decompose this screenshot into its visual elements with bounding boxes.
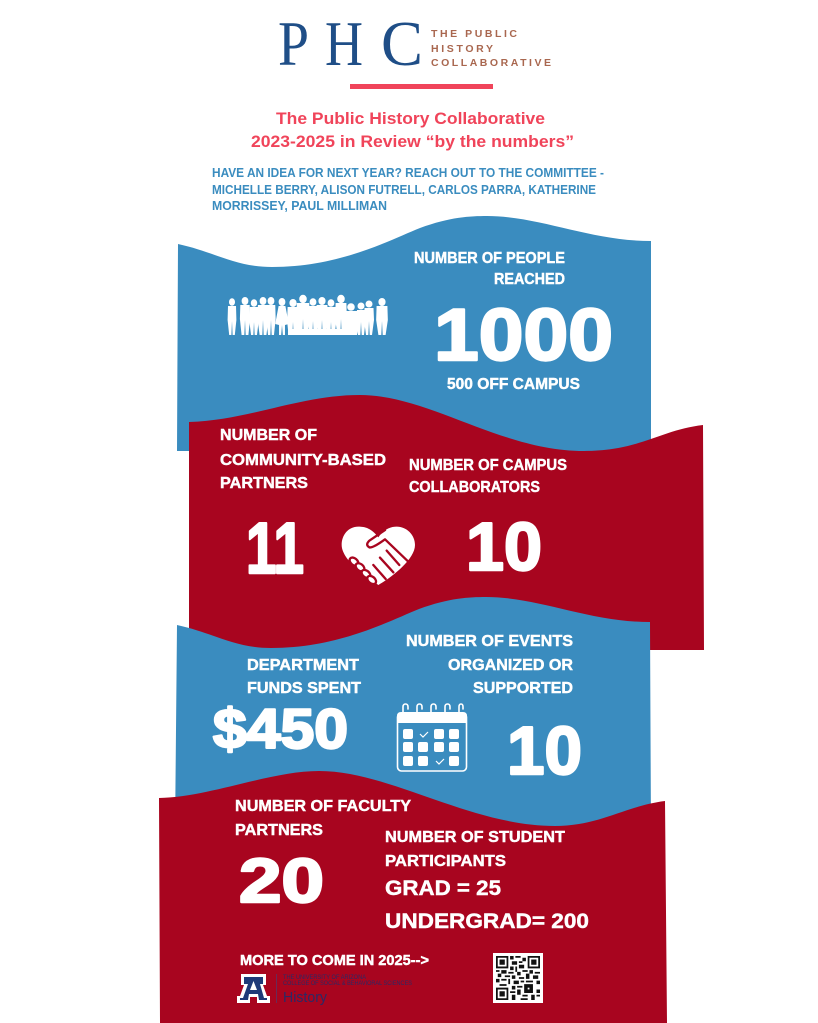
events label: ORGANIZED OR (448, 657, 573, 674)
student participants: UNDERGRAD= 200 (385, 910, 589, 933)
committee note (212, 166, 604, 213)
icon: crowd silhouette (228, 295, 388, 335)
logo: PHC The Public History Collaborative: H (325, 9, 363, 79)
committee note: MORRISSEY, PAUL MILLIMAN (212, 199, 387, 213)
committee note: HAVE AN IDEA FOR NEXT YEAR? REACH OUT TO THE COMMITTEE - (212, 166, 604, 180)
community partners label: NUMBER OF (220, 427, 317, 444)
logo: University of Arizona History: COLLEGE OF SOCIAL & BEHAVIORAL SCIENCES (283, 981, 412, 987)
number: 10 events: 10 (507, 713, 582, 789)
campus collaborators label: COLLABORATORS (409, 479, 540, 496)
panel: funds and events (175, 597, 651, 835)
community partners label: PARTNERS (220, 475, 308, 492)
logo: PHC The Public History Collaborative: P (278, 9, 309, 79)
logo: University of Arizona History (237, 974, 412, 1006)
community partners label: COMMUNITY-BASED (220, 452, 386, 469)
committee note: MICHELLE BERRY, ALISON FUTRELL, CARLOS PARRA, KATHERINE (212, 183, 596, 197)
number: 1000: 1000 (434, 295, 613, 376)
community partners label (220, 427, 386, 492)
panel: partners and collaborators (189, 395, 704, 650)
title (251, 110, 574, 151)
number: 10 collaborators: 10 (466, 509, 542, 585)
number: 11: 11 (246, 509, 304, 589)
funds label (247, 657, 361, 697)
funds label: DEPARTMENT (247, 657, 359, 674)
logo: PHC The Public History Collaborative: C (381, 9, 423, 79)
student participants: PARTICIPANTS (385, 853, 506, 870)
faculty label: NUMBER OF FACULTY (235, 798, 411, 815)
logo: PHC The Public History Collaborative: THE PUBLIC (431, 28, 517, 40)
people reached label: NUMBER OF PEOPLE (414, 250, 565, 267)
funds label: FUNDS SPENT (247, 680, 361, 697)
campus collaborators label: NUMBER OF CAMPUS (409, 457, 567, 474)
logo: University of Arizona History: THE UNIVERSITY OF ARIZONA (283, 975, 366, 981)
logo: University of Arizona History: History (283, 989, 327, 1006)
panel: people reached (177, 216, 651, 451)
title: 2023-2025 in Review “by the numbers” (251, 133, 574, 151)
faculty label (235, 798, 411, 839)
student participants (385, 829, 589, 933)
icon: handshake heart (342, 527, 415, 586)
number: 20: 20 (239, 847, 324, 916)
logo: PHC The Public History Collaborative: COLLABORATIVE (431, 57, 551, 69)
QR code (493, 953, 543, 1003)
student participants: GRAD = 25 (385, 877, 501, 900)
events label: NUMBER OF EVENTS (406, 633, 573, 650)
faculty label: PARTNERS (235, 822, 323, 839)
more to come: MORE TO COME IN 2025--> (240, 953, 429, 969)
student participants: NUMBER OF STUDENT (385, 829, 565, 846)
events label: SUPPORTED (473, 680, 573, 697)
people reached label: REACHED (494, 271, 565, 288)
campus collaborators label (409, 457, 567, 496)
title: The Public History Collaborative (276, 110, 545, 128)
panel: faculty and students (159, 771, 667, 1023)
header divider (350, 84, 493, 89)
people reached label (414, 250, 565, 288)
off campus note: 500 OFF CAMPUS (447, 376, 580, 393)
logo: PHC The Public History Collaborative: HISTORY (431, 43, 493, 55)
events label (406, 633, 573, 697)
logo: PHC The Public History Collaborative (278, 9, 551, 79)
icon: calendar (397, 704, 467, 771)
number: $450: $450 (213, 697, 348, 760)
